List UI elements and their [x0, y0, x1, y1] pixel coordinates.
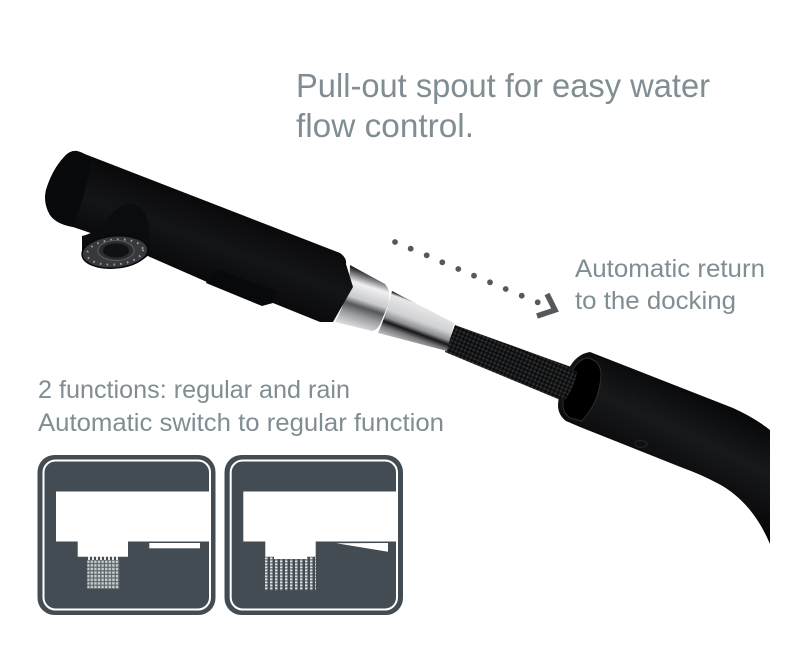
panel: regular function	[38, 455, 216, 615]
dock opening	[563, 358, 601, 421]
panel: rain function	[224, 455, 403, 615]
water: rain spray	[265, 556, 316, 590]
spout head body	[45, 151, 353, 322]
title: Pull-out spout for easy water	[296, 67, 710, 104]
caption: automatic return	[575, 255, 765, 315]
hose entering dock	[550, 362, 577, 400]
water: regular jet	[87, 556, 119, 589]
braided hose	[445, 325, 585, 404]
caption: automatic return: Automatic return	[575, 255, 765, 283]
caption: two functions: Automatic switch to regular function	[38, 409, 444, 437]
caption: two functions: 2 functions: regular and rain	[38, 376, 350, 404]
caption: automatic return: to the docking	[575, 287, 736, 315]
chrome connector	[335, 265, 454, 351]
spout button	[206, 270, 278, 306]
nozzle	[81, 204, 150, 271]
caption: two functions	[38, 376, 444, 437]
dock body	[558, 352, 770, 544]
spout end cap shading	[45, 151, 90, 227]
title second line: flow control.	[296, 107, 474, 144]
arrow: dotted return direction	[392, 239, 555, 316]
dock screw	[635, 440, 647, 448]
